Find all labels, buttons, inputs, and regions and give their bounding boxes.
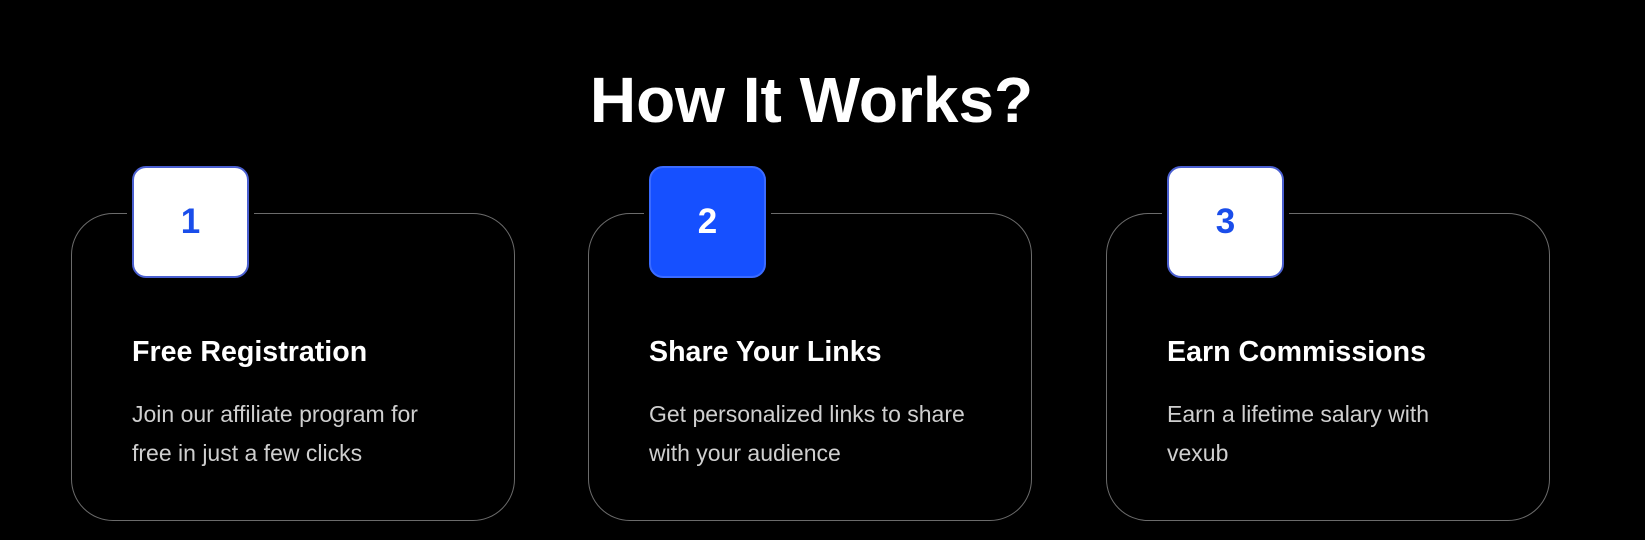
badge: step 1 [132,166,249,278]
badge: step 3 [1167,166,1284,278]
badge: step 2: 2 [698,202,717,241]
panel: step 3 card [1106,213,1550,521]
panel: step 2 card [588,213,1032,521]
heading: step 1: Free Registration [132,336,367,368]
heading: step 3: Earn Commissions [1167,336,1426,368]
text: step 1: Join our affiliate program for free in just a few clicks [132,401,418,466]
panel: step 1 card [71,213,515,521]
badge: step 2 [649,166,766,278]
badge: step 3: 3 [1216,202,1235,241]
text: step 3: Earn a lifetime salary with vexub [1167,401,1429,466]
title: How It Works? [590,64,1033,136]
text: step 2: Get personalized links to share with your audience [649,401,965,466]
badge: step 1: 1 [181,202,200,241]
heading: step 2: Share Your Links [649,336,882,368]
